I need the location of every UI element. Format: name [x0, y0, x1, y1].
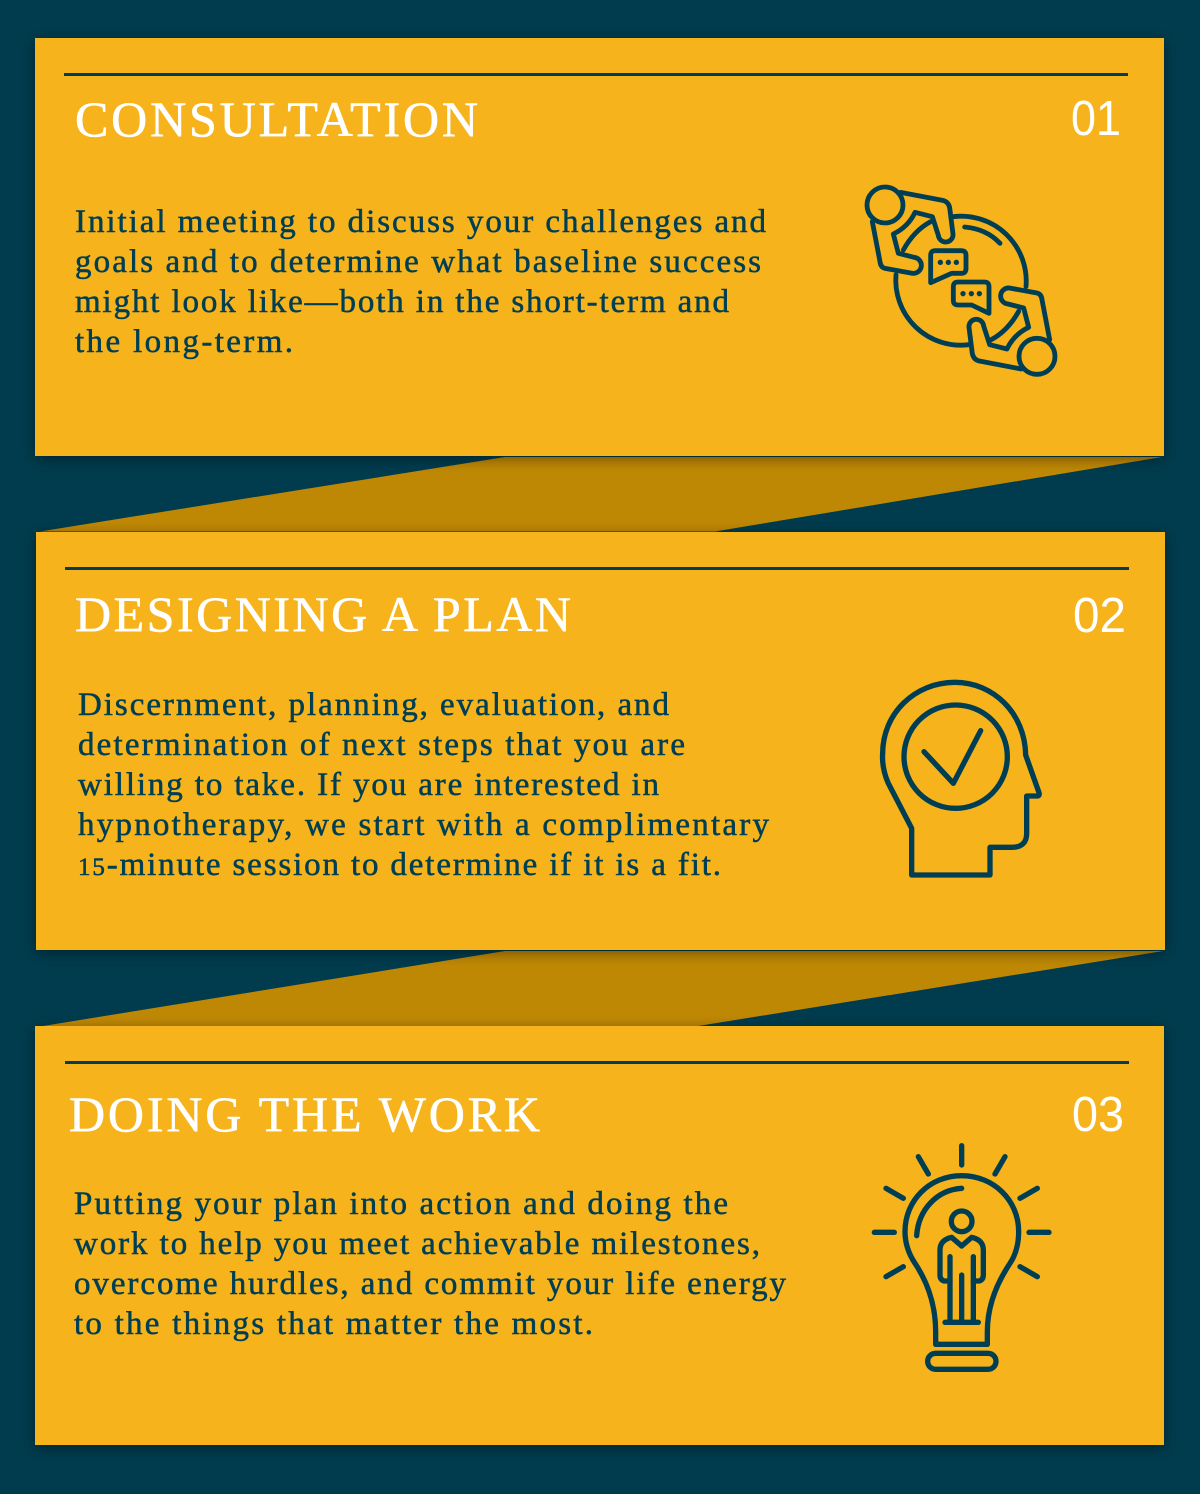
number 03: 03 [1072, 1088, 1124, 1142]
connector band 2 [40, 951, 1163, 1026]
text block: consultation: might look like—both in the short-term and [75, 284, 730, 320]
text block: consultation: the long-term. [75, 324, 293, 360]
heading: designing a plan: DESIGNING A PLAN [75, 586, 571, 642]
number 01: 01 [1071, 92, 1121, 146]
text block: doing the work: overcome hurdles, and commit your life energy [74, 1266, 786, 1302]
text block: doing the work: work to help you meet achievable milestones, [74, 1226, 760, 1262]
heading: consultation: CONSULTATION [75, 91, 478, 147]
text block: consultation [75, 204, 766, 360]
panel: consultation [35, 38, 1164, 456]
icon: two people talking [867, 187, 1055, 374]
text block: designing a plan [78, 687, 770, 883]
text block: designing a plan: 15-minute session to determine if it is a fit. [78, 847, 721, 883]
number 02: 02 [1073, 589, 1126, 643]
text block: designing a plan: determination of next steps that you are [78, 727, 685, 763]
text block: designing a plan: hypnotherapy, we start with a complimentary [78, 807, 770, 843]
text block: consultation: goals and to determine what baseline success [75, 244, 761, 280]
text block: doing the work: to the things that matter the most. [74, 1306, 593, 1342]
text block: doing the work: Putting your plan into action and doing the [74, 1186, 728, 1222]
icon: light bulb with person [874, 1146, 1049, 1369]
panel: doing the work [35, 1026, 1164, 1445]
text block: consultation: Initial meeting to discuss your challenges and [75, 204, 766, 240]
heading: doing the work: DOING THE WORK [69, 1086, 540, 1142]
text block: doing the work [74, 1186, 786, 1342]
connector band 1 [40, 457, 1162, 532]
text block: designing a plan: willing to take. If you are interested in [78, 767, 659, 803]
panel: designing a plan [36, 532, 1165, 950]
text block: designing a plan: Discernment, planning, evaluation, and [78, 687, 669, 723]
icon: head with check mark [883, 682, 1039, 875]
